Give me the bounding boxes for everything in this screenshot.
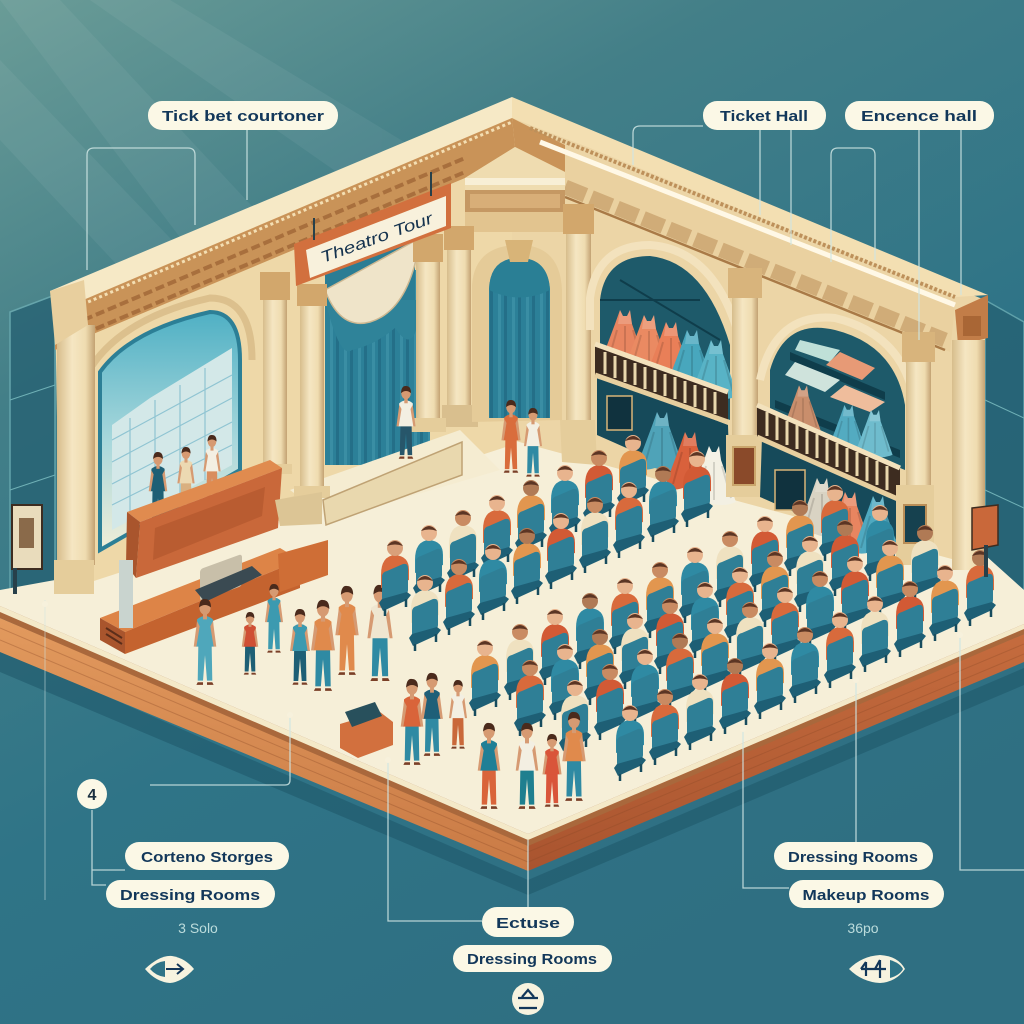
icon: circle arrow bbox=[512, 983, 544, 1015]
leader lines bbox=[45, 126, 1024, 921]
label: ticket hall bbox=[703, 101, 826, 130]
label: ticket counter bbox=[148, 101, 338, 130]
pediment centre bbox=[465, 147, 565, 232]
label: makeup rooms bbox=[789, 880, 944, 908]
label: entrance hall: Encence hall bbox=[861, 108, 977, 125]
icon: left eye arrow bbox=[145, 956, 194, 983]
stage front wall bbox=[278, 442, 462, 525]
platform bbox=[0, 425, 1024, 895]
seating back rows bbox=[379, 435, 713, 651]
label: dressing rooms centre bbox=[453, 945, 612, 972]
seating front block bbox=[469, 485, 996, 781]
number badge: 4 bbox=[88, 787, 97, 804]
roof beam right bbox=[512, 97, 988, 352]
label: costume storage: Corteno Storges bbox=[141, 849, 273, 866]
light rays bbox=[0, 0, 500, 300]
ticket desk bbox=[126, 460, 282, 578]
sign left bbox=[12, 505, 42, 594]
theatre tour sign: Theatro Tour bbox=[319, 210, 436, 267]
lower room 2 bbox=[760, 437, 900, 556]
ticket machine bbox=[340, 702, 393, 758]
caption: 36po: 36po bbox=[847, 920, 879, 936]
label: makeup rooms: Makeup Rooms bbox=[802, 887, 930, 904]
ticket staff bbox=[149, 435, 221, 523]
balcony 2 bbox=[757, 405, 900, 500]
label: entrance bbox=[482, 907, 574, 937]
wall: left bbox=[55, 110, 512, 592]
icon: right eye arrows bbox=[849, 955, 905, 983]
steps bbox=[275, 492, 322, 526]
dresses upper room 1 bbox=[600, 310, 738, 399]
label: dressing rooms centre: Dressing Rooms bbox=[467, 951, 597, 968]
balcony 1 bbox=[595, 344, 728, 422]
columns on stage bbox=[258, 226, 478, 498]
corner capital right bbox=[955, 295, 988, 345]
label: dressing rooms left: Dressing Rooms bbox=[120, 887, 260, 904]
label: ticket hall: Ticket Hall bbox=[720, 108, 808, 125]
counter with computer bbox=[100, 540, 328, 654]
label: entrance hall bbox=[845, 101, 994, 130]
roof beam left bbox=[50, 97, 515, 350]
stage curtains bbox=[325, 240, 430, 465]
side glass panel left bbox=[10, 295, 55, 590]
column 2 bbox=[726, 268, 762, 497]
sign right bbox=[972, 505, 998, 577]
side glass panel right bbox=[985, 300, 1024, 600]
label: dressing rooms right: Dressing Rooms bbox=[788, 849, 918, 866]
column by door bbox=[560, 204, 597, 465]
theatre tour sign bbox=[294, 172, 451, 286]
corner pillar left bbox=[50, 280, 95, 594]
label: entrance: Ectuse bbox=[496, 915, 560, 932]
upper room 1 bbox=[590, 245, 740, 420]
label: dressing rooms left bbox=[106, 880, 275, 908]
stage floor bbox=[290, 430, 500, 520]
standing queue bbox=[194, 584, 393, 691]
stage performers bbox=[396, 386, 542, 477]
column 3 and pillar right bbox=[896, 332, 985, 570]
label: dressing rooms right bbox=[774, 842, 933, 870]
front queue bbox=[401, 673, 586, 809]
lower room 1 bbox=[597, 375, 736, 505]
label: costume storage bbox=[125, 842, 289, 870]
arched door bbox=[472, 240, 562, 422]
label: ticket counter: Tick bet courtoner bbox=[162, 108, 324, 125]
number badge bbox=[77, 779, 107, 809]
upper room 2 bbox=[760, 318, 915, 470]
wall: right bbox=[512, 110, 985, 568]
caption: 3 solo: 3 Solo bbox=[178, 920, 218, 936]
swag curtain bbox=[325, 238, 420, 323]
mural window bbox=[88, 298, 252, 550]
line dots bbox=[42, 601, 963, 763]
